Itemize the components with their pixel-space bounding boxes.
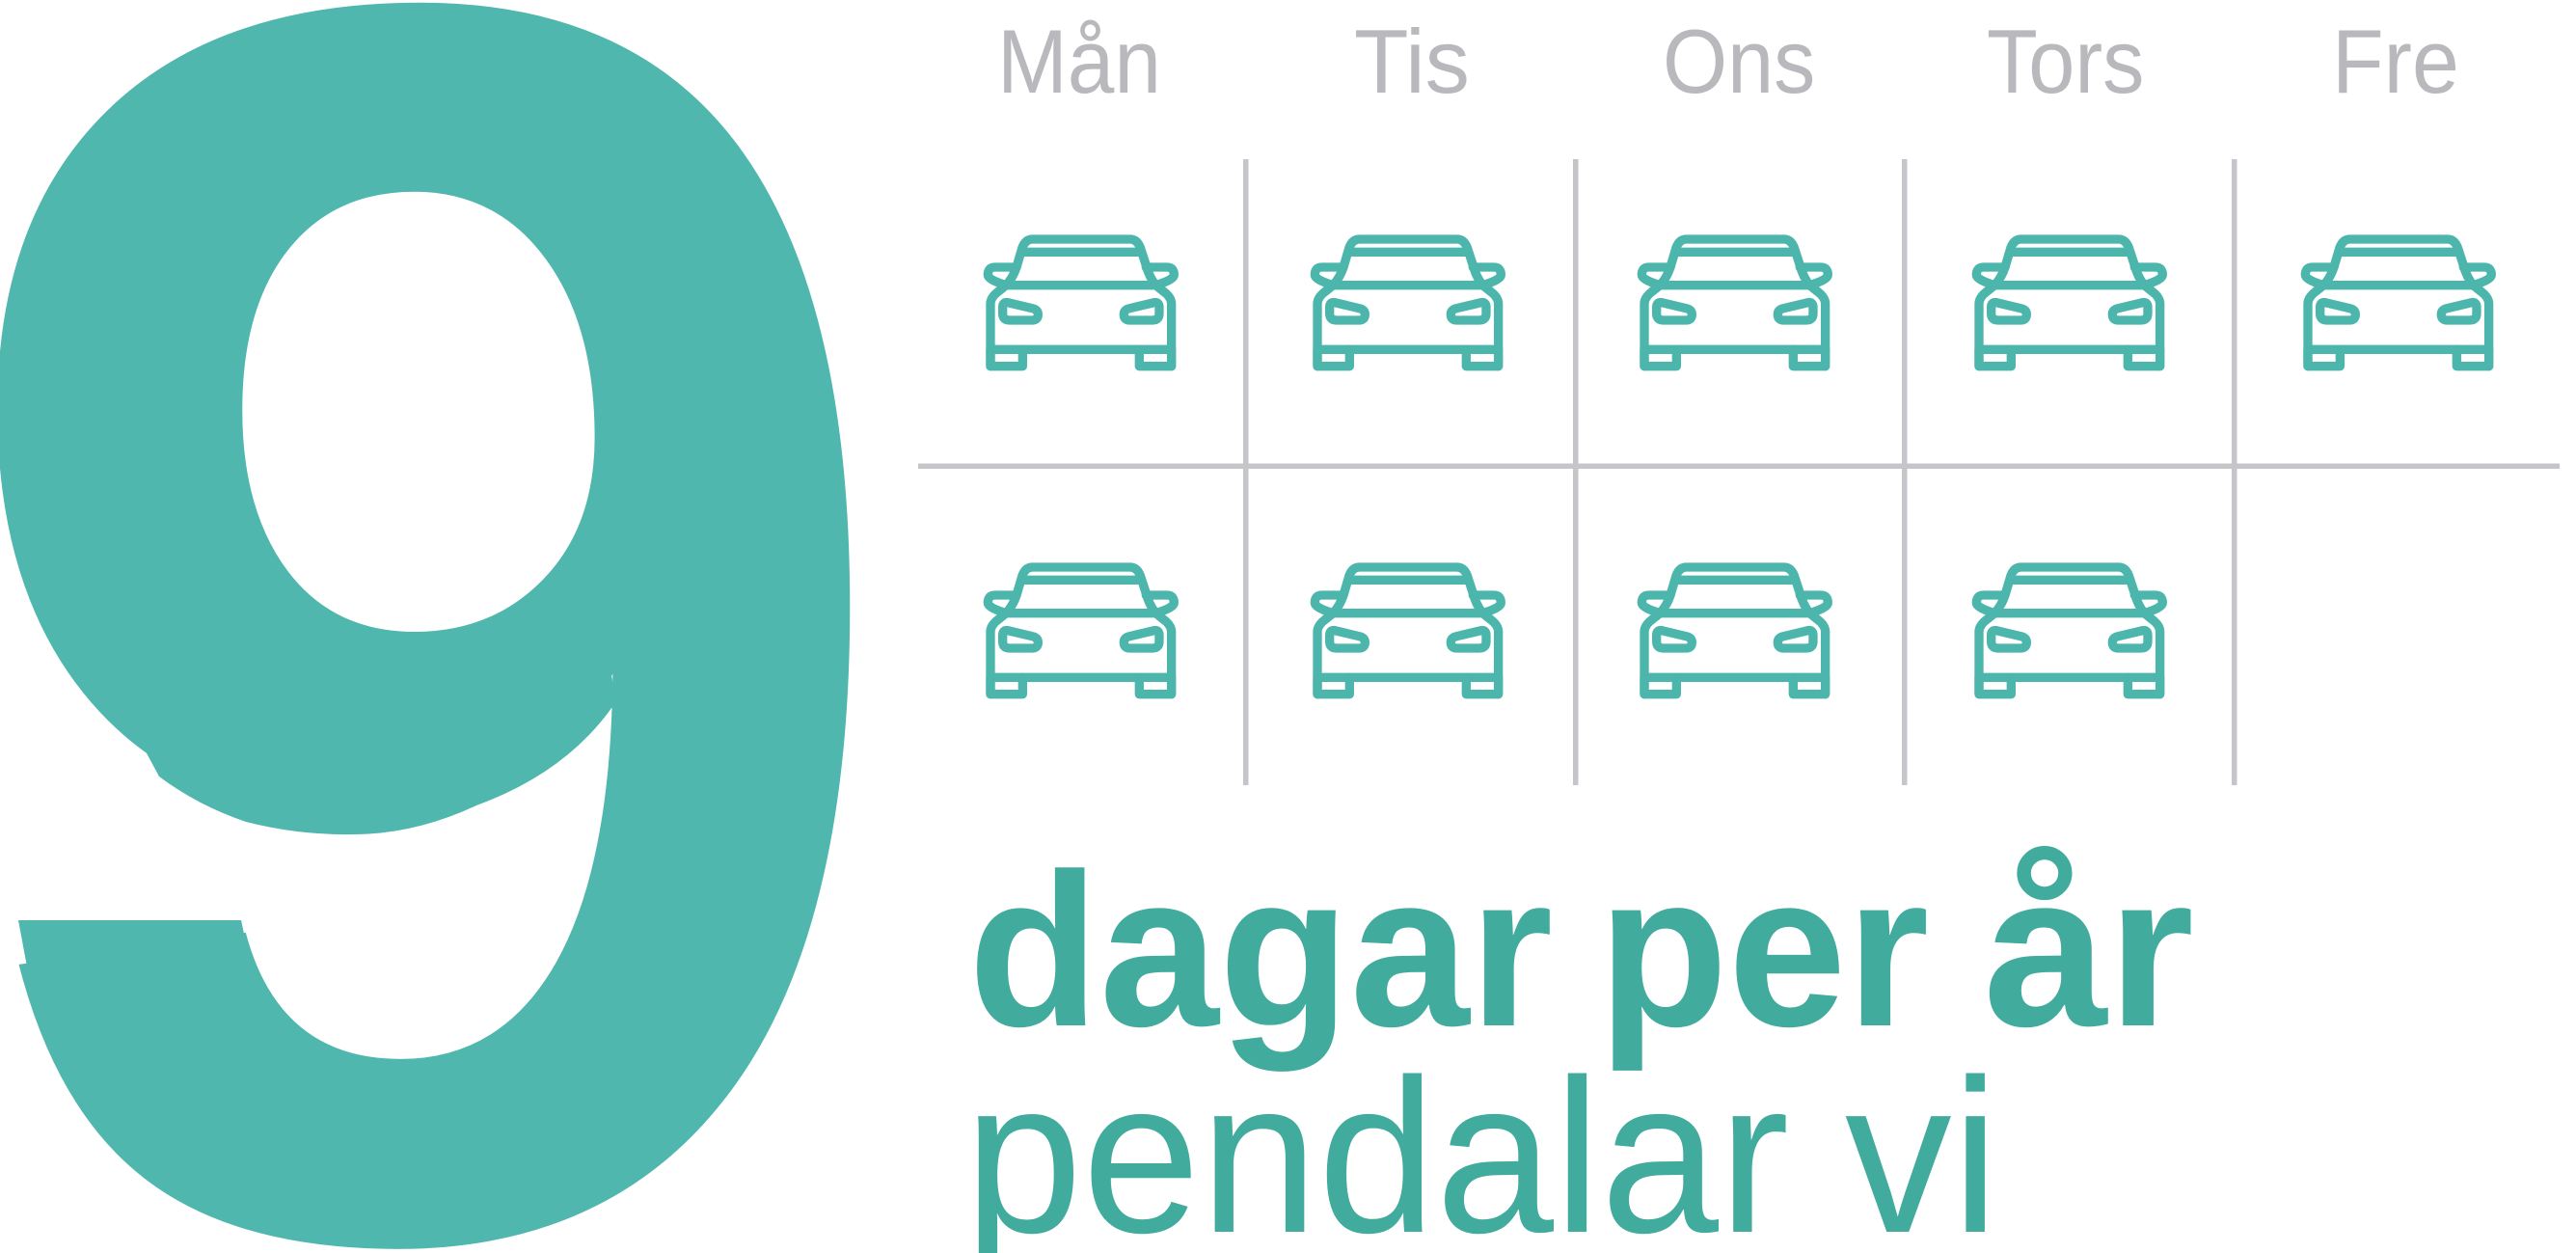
weekday headers [997,11,2459,113]
heading: dagar per år: dagar [968,828,1553,1072]
icon: car row 1 Mån [988,239,1174,367]
label: Mån: Mån [997,12,1161,113]
label: Fre: Fre [2332,12,2459,113]
icon: car row 1 Ons [1641,239,1828,367]
heading: dagar per år: per [1598,830,1929,1073]
icon: car row 2 Ons [1641,567,1828,695]
icon: car row 1 Fre [2305,239,2491,367]
icon: car row 2 Mån [988,567,1174,695]
icon: car row 2 Tors [1976,567,2162,695]
icon: car row 2 Tis [1315,567,1501,695]
icon: car row 1 Tis [1315,239,1501,367]
heading: dagar per år: år [1984,829,2194,1073]
heading: dagar per år [968,828,2194,1073]
icon: car row 1 Tors [1976,239,2162,367]
calendar grid [918,159,2560,785]
label: Tis: Tis [1354,11,1470,112]
label: Ons: Ons [1663,12,1815,113]
label: Tors: Tors [1987,12,2144,113]
